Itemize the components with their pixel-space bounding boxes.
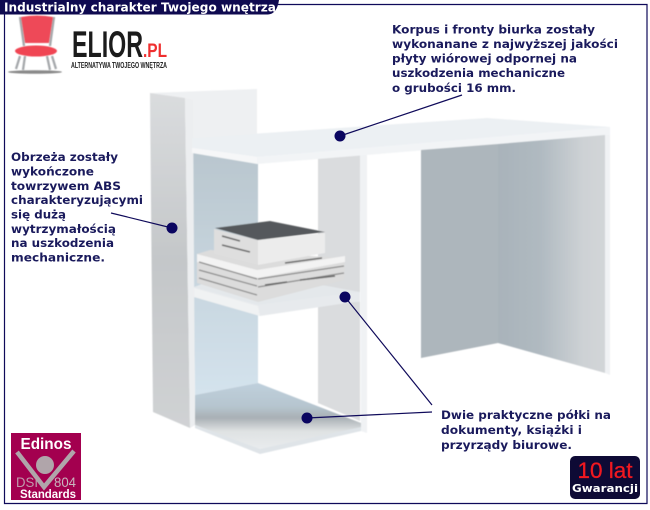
warranty years: 10 lat [578,458,632,483]
books [197,221,345,302]
callout text: towrzywem ABS [11,179,121,193]
desktop [192,118,610,164]
callout: desktop material [334,22,618,142]
callout text [392,22,618,95]
icon: red chair [8,16,62,74]
callout: shelves [302,292,611,452]
logo: Elior [8,16,167,74]
badge emblem [17,451,74,487]
logo suffix: .PL [143,41,167,62]
badge: Edinos standards: 804 [54,474,76,490]
callout text: o grubości 16 mm. [392,81,516,95]
back panel [150,89,257,150]
badge: Edinos standards [11,433,81,501]
callout text: wykończone [11,164,94,178]
middle shelf [194,270,360,316]
badge labels: DSI [16,474,38,490]
badge heading: Edinos [20,436,72,453]
desk illustration [150,89,610,454]
callout text: przyrządy biurowe. [441,438,572,452]
callout: edges [11,150,178,264]
callout text: Korpus i fronty biurka zostały [392,22,596,36]
callout text: wytrzymałością [11,222,116,236]
leader line and dot [111,213,178,234]
badge footer: Standards [20,489,76,501]
callout text: na uszkodzenia [11,236,114,250]
callout text: dokumenty, książki i [441,423,582,437]
callout text: Dwie praktyczne półki na [441,408,611,422]
callout text [11,150,143,264]
leader lines and dots [302,292,432,424]
left bay back wall [192,150,258,395]
callout text: uszkodzenia mechaniczne [392,66,565,80]
callout text: wykonanane z najwyższej jakości [392,37,618,51]
tall side panel [150,93,190,428]
logo tagline: ALTERNATYWA TWOJEGO WNĘTRZA [71,61,167,70]
callout text: charakteryzującymi [11,193,143,207]
warranty label: Gwarancji [572,482,638,495]
divider edge [360,154,367,433]
right leg [421,135,610,375]
callout text: się dużą [11,208,66,222]
badge: 10 year warranty [570,456,640,499]
floor shelf [195,383,361,454]
callout text: Obrzeża zostały [11,150,119,164]
callout text [441,408,611,452]
side panel edge [185,98,195,428]
logo wordmark: ELIOR [72,24,143,65]
callout text: mechaniczne. [11,250,105,264]
centre divider [318,154,360,421]
callout text: płyty wiórowej odpornej na [392,52,577,66]
leader line and dot [334,95,462,142]
